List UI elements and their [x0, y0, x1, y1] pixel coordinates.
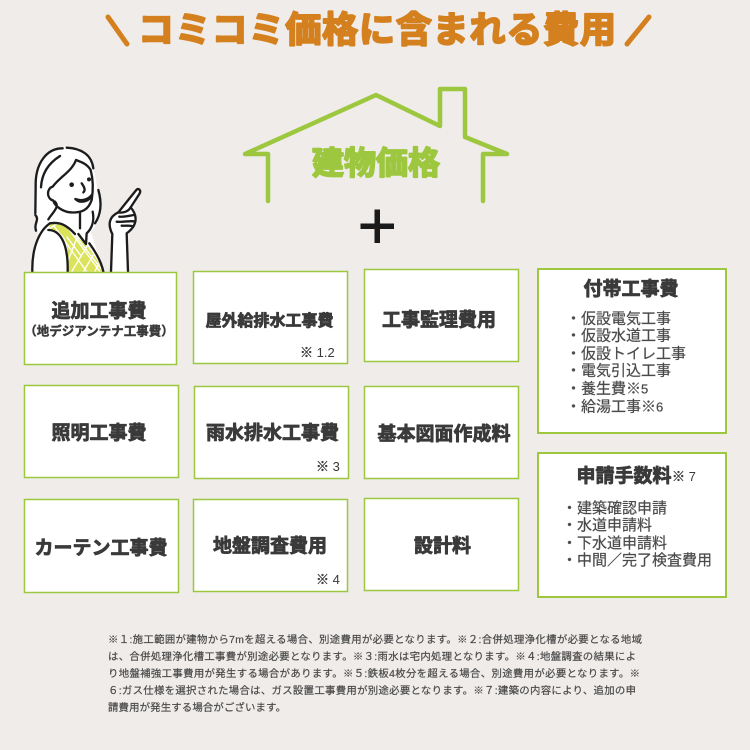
illustration: woman pointing: [32, 147, 140, 272]
panel: outdoor plumbing: [194, 272, 348, 364]
panel: additional work: [24, 272, 176, 364]
note mark: ※ 1.2: [300, 345, 335, 360]
panel: ground survey: [194, 500, 348, 592]
panel: application fees: [538, 453, 726, 597]
list: application items: ・建築確認申請: [562, 499, 667, 517]
panel: outdoor plumbing: 屋外給排水工事費: [205, 311, 334, 330]
list: incidental items: [566, 310, 686, 416]
list: application items: [562, 499, 712, 569]
list: incidental items: ・電気引込工事: [566, 362, 671, 380]
footnotes: ６:ガス仕様を選択された場合は、ガス設置工事費用が別途必要となります。※７:建築の内容により、追加の申: [108, 684, 636, 697]
note mark: ※ 7: [672, 469, 696, 484]
panel: design fee: [364, 498, 518, 590]
list: application items: ・中間／完了検査費用: [562, 552, 712, 569]
footnotes: り地盤補強工事費用が発生する場合があります。※５:鉄板4枚分を超える場合、別途費用が必要となります。※: [108, 667, 640, 680]
list: incidental items: ・給湯工事※6: [566, 398, 663, 416]
footnotes: [108, 633, 642, 714]
panel: rainwater drainage: 雨水排水工事費: [206, 422, 339, 444]
panel: incidental work: 付帯工事費: [583, 278, 679, 300]
title: コミコミ価格に含まれる費用: [138, 9, 616, 50]
panel: drawings: [364, 386, 518, 478]
note mark: ※ 3: [316, 459, 340, 474]
list: incidental items: ・仮設電気工事: [566, 310, 671, 328]
footnotes: ※１:施工範囲が建物から7mを超える場合、別途費用が必要となります。※２:合併処理浄化槽が必要となる地域: [108, 633, 642, 646]
icon: house outline: [245, 89, 507, 201]
panel: curtains: [24, 500, 178, 592]
list: incidental items: ・仮設トイレ工事: [566, 346, 686, 362]
list: incidental items: ・養生費※5: [566, 380, 648, 398]
panel: drawings: 基本図面作成料: [377, 422, 511, 445]
panel: lighting: [24, 386, 178, 478]
sub label: TV antenna: （地デジアンテナ工事費）: [24, 324, 174, 338]
list: incidental items: ・仮設水道工事: [566, 328, 671, 344]
panel: supervision: [364, 270, 518, 362]
panel: incidental work: [538, 269, 726, 433]
panel: additional work: 追加工事費: [51, 300, 147, 322]
panel: application fees: 申請手数料: [576, 465, 672, 487]
footnotes: 請費用が発生する場合がございます。: [108, 701, 286, 714]
list: application items: ・水道申請料: [562, 517, 652, 534]
panel: design fee: 設計料: [414, 534, 471, 557]
panel: ground survey: 地盤調査費用: [213, 535, 327, 557]
panel: rainwater drainage: [194, 386, 348, 478]
icon: plus sign: [360, 210, 394, 243]
heading: building price: 建物価格: [312, 145, 440, 181]
panel: lighting: 照明工事費: [51, 422, 147, 444]
footnotes: は、合併処理浄化槽工事費が別途必要となります。※３:雨水は宅内処理となります。※４:地盤調査の結果によ: [108, 650, 636, 663]
list: application items: ・下水道申請料: [562, 535, 667, 552]
panel: supervision: 工事監理費用: [382, 309, 496, 331]
panel: curtains: カーテン工事費: [34, 537, 168, 559]
note mark: ※ 4: [316, 572, 340, 587]
